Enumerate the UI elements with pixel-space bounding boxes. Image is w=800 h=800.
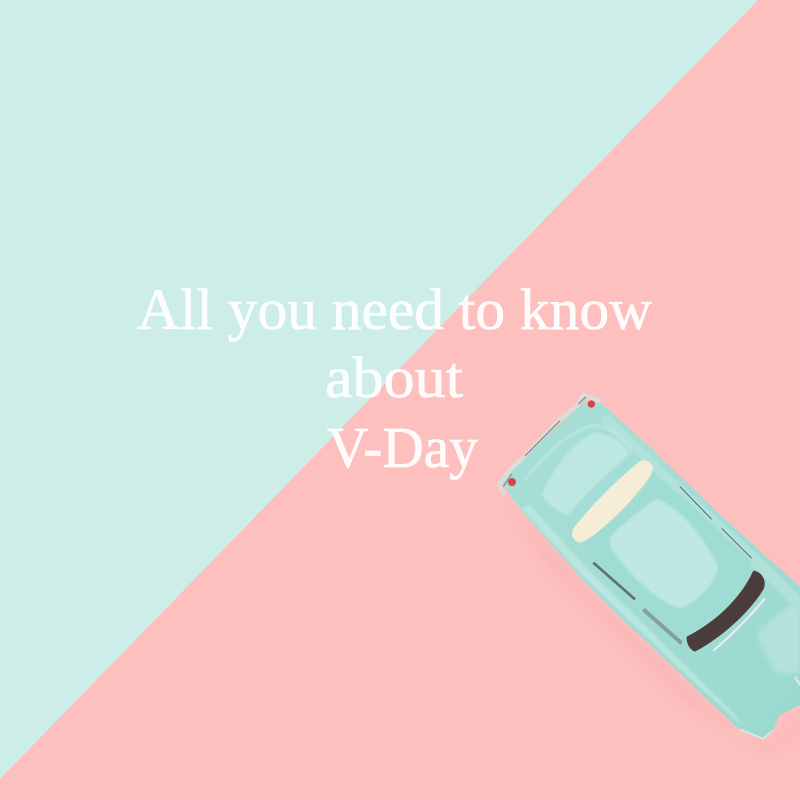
roof inner panel xyxy=(610,498,718,608)
right tail light xyxy=(588,400,595,408)
rear window cream xyxy=(572,460,653,542)
side window front xyxy=(593,563,635,599)
chrome bumper shadow xyxy=(503,397,586,487)
front bumper corner xyxy=(740,729,773,739)
side window rear xyxy=(643,609,682,643)
chrome bumper xyxy=(499,395,600,495)
rear deck outline highlight xyxy=(525,425,632,480)
title: V-Day xyxy=(327,415,478,480)
title: All you need to know xyxy=(137,277,652,342)
car shadow xyxy=(510,503,800,753)
left tail light xyxy=(508,478,516,486)
title: about xyxy=(325,345,463,410)
right side door line two xyxy=(722,528,752,558)
lower flank highlight xyxy=(522,505,743,727)
car body xyxy=(501,401,800,739)
upper flank highlight xyxy=(600,413,800,613)
roof outer xyxy=(580,477,752,638)
windshield trim xyxy=(713,598,765,651)
windshield xyxy=(687,571,765,652)
front trim xyxy=(795,677,800,685)
icon: turquoise toy car xyxy=(499,395,800,753)
hood highlight xyxy=(757,603,800,673)
right side door line one xyxy=(680,487,712,519)
rear deck panel xyxy=(542,433,629,515)
